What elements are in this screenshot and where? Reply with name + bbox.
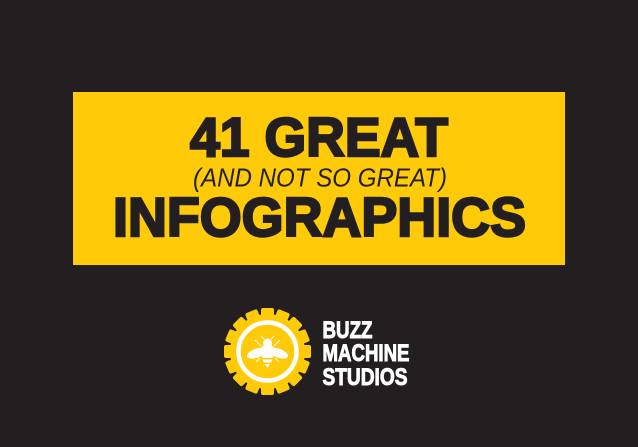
heading: 41 great: 41 GREAT <box>190 106 448 168</box>
logo wordmark: buzz machine studios: STUDIOS <box>322 364 408 391</box>
logo wordmark: buzz machine studios: MACHINE <box>322 340 410 367</box>
logo wordmark: buzz machine studios <box>322 317 410 391</box>
subheading: and not so great: (AND NOT SO GREAT) <box>193 162 447 192</box>
heading: infographics: INFOGRAPHICS <box>113 186 526 248</box>
logo wordmark: buzz machine studios: BUZZ <box>322 317 373 344</box>
icon: bee <box>246 336 289 368</box>
logo: gear with bee <box>224 308 311 395</box>
panel: title banner <box>73 92 565 265</box>
